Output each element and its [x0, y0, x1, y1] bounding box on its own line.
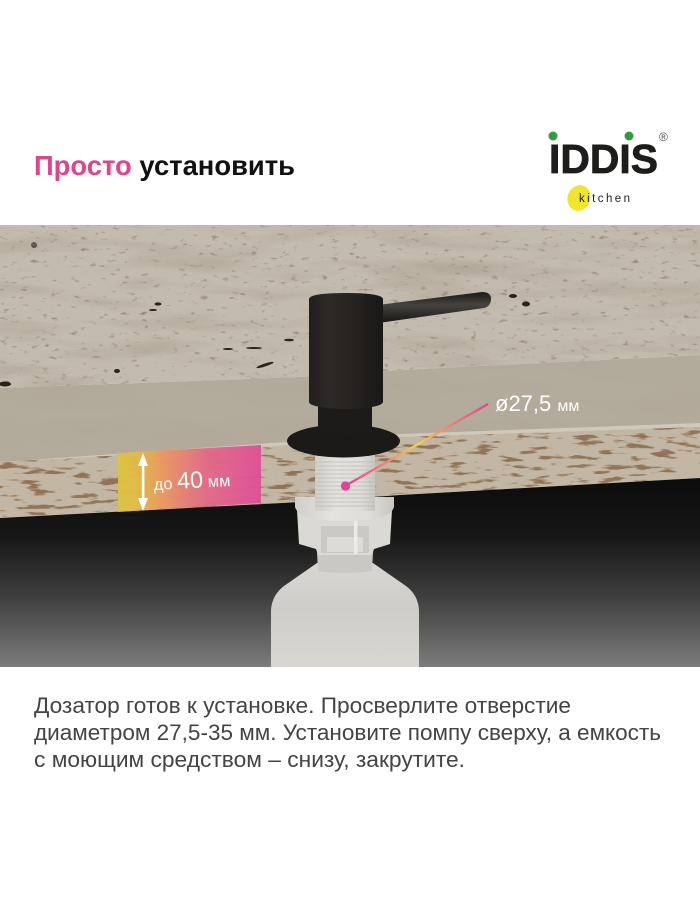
dispenser — [271, 292, 491, 667]
particle board edge — [0, 425, 700, 520]
logo green dots — [548, 132, 634, 140]
countertop top surface — [0, 225, 700, 390]
base flange — [287, 424, 400, 458]
line 3: с моющим средством – снизу, закрутите. — [34, 747, 465, 772]
kitchen wordmark: kitchen — [579, 193, 630, 205]
dispenser bottle — [271, 563, 419, 667]
leader line — [345, 404, 488, 486]
title: Просто установить — [34, 150, 295, 181]
pump lever — [370, 292, 491, 323]
countertop front face — [0, 355, 700, 466]
line 1: Дозатор готов к установке. Просверлите отверстие — [34, 693, 571, 718]
thickness label: до 40 мм — [153, 465, 231, 495]
description text — [34, 693, 661, 772]
leader dot — [341, 481, 350, 491]
double arrow — [138, 453, 148, 511]
gradient badge — [118, 445, 261, 512]
registered mark: ® — [659, 130, 668, 144]
line 2: диаметром 27,5-35 мм. Установите помпу сверху, а емкость — [34, 720, 661, 745]
logo: IDDIS kitchen — [548, 130, 668, 214]
threaded stem — [315, 455, 375, 511]
bottle neck — [317, 552, 373, 573]
lock nut — [295, 497, 394, 555]
dark cabinet space — [0, 478, 700, 667]
infographic canvas — [0, 132, 700, 772]
diameter label: ø27,5 мм — [495, 391, 579, 416]
neck — [318, 404, 372, 435]
photo: countertop with dispenser — [0, 225, 700, 667]
callout: diameter — [341, 391, 579, 491]
callout: thickness up to 40 mm — [118, 445, 261, 512]
yellow spot — [564, 182, 594, 214]
pump head — [309, 293, 383, 409]
logo wordmark: IDDIS — [549, 136, 658, 182]
